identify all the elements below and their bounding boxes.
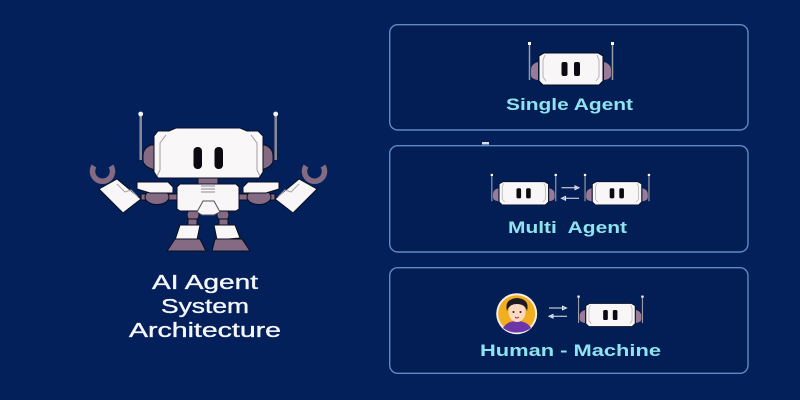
large robot illustration	[93, 112, 325, 251]
human machine frame	[390, 268, 748, 373]
title: Architecture	[129, 320, 281, 342]
single agent label: Single Agent	[506, 95, 633, 114]
panel: multi agent	[390, 146, 748, 252]
title: System	[161, 296, 249, 318]
robot legs	[175, 225, 240, 240]
single agent frame	[390, 25, 748, 130]
multi agent label: Multi Agent	[508, 218, 627, 237]
multi agent frame	[390, 146, 748, 252]
robot feet	[167, 239, 250, 251]
icon: human avatar	[496, 293, 537, 334]
robot head	[154, 128, 263, 178]
human machine label: Human - Machine	[480, 341, 661, 360]
icon: machine robot head	[577, 296, 644, 327]
title: AI Agent	[152, 272, 259, 294]
robot hands	[99, 179, 317, 213]
robot antennas	[138, 112, 278, 160]
panel: single agent	[390, 25, 748, 130]
panel: human machine	[390, 268, 748, 373]
icon: second robot head	[584, 174, 650, 205]
robot claws	[93, 166, 325, 181]
robot torso	[177, 184, 239, 215]
robot neck and limbs	[141, 178, 275, 226]
icon: first robot head	[491, 174, 557, 205]
arrows between agents	[562, 186, 579, 200]
title	[129, 272, 281, 342]
robot shoulders	[137, 182, 279, 193]
arrows between human and machine	[549, 306, 567, 318]
stray dash mark	[482, 142, 489, 144]
robot ears	[143, 145, 273, 170]
icon: single robot head	[528, 42, 614, 85]
